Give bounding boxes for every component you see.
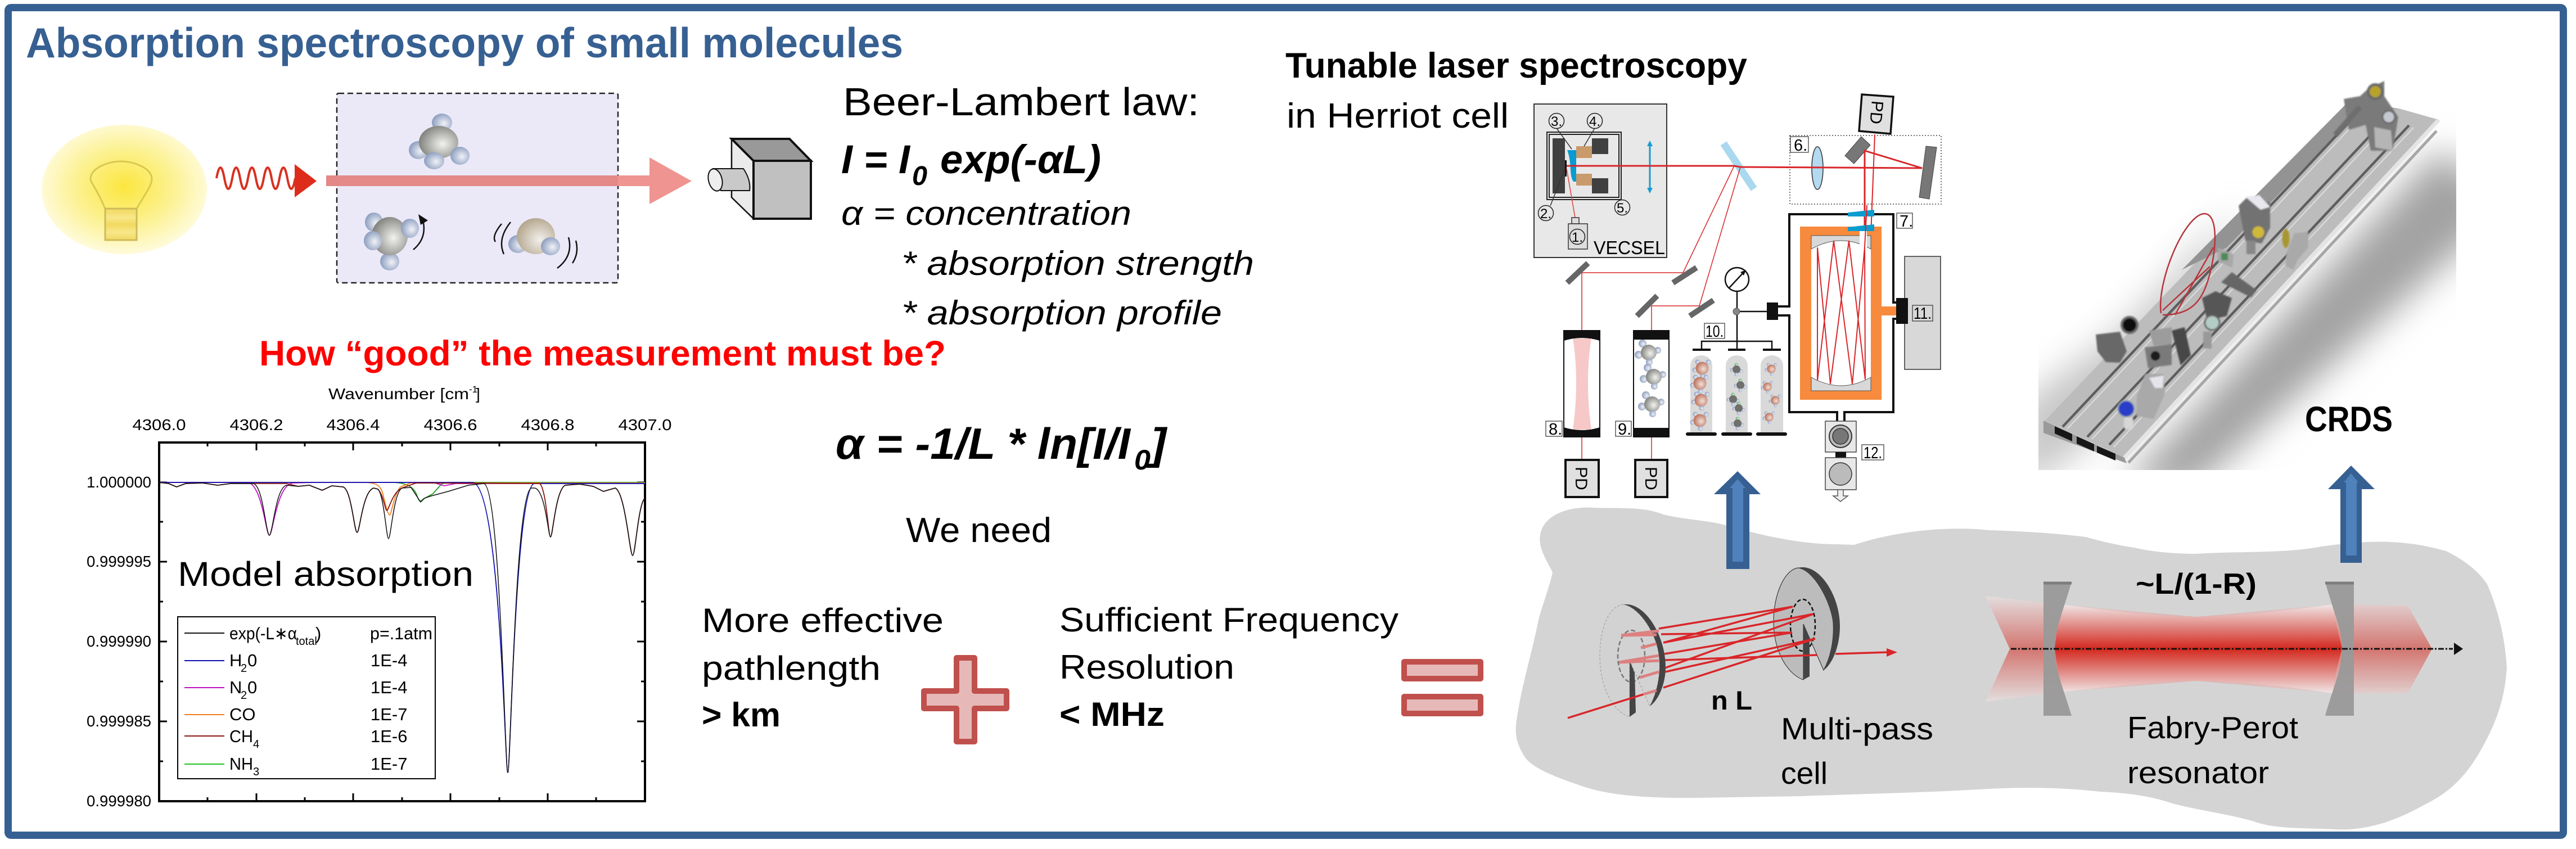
text: alpha definition bbox=[841, 195, 1254, 332]
square plate with hole bbox=[2149, 327, 2172, 346]
rail shadow bbox=[2038, 136, 2456, 470]
chart legend: 1E-4 bbox=[371, 651, 407, 670]
panel: VECSEL: 1. bbox=[1572, 230, 1583, 245]
equation: Beer-Lambert: I = I bbox=[841, 138, 910, 182]
text: sufficient frequency resolution bbox=[1059, 601, 1398, 733]
text: more effective pathlength bbox=[702, 602, 944, 734]
text: sufficient frequency resolution: Sufficient Frequency bbox=[1059, 601, 1398, 639]
component number labels: 10. bbox=[1706, 323, 1724, 341]
equation: alpha: ] bbox=[1146, 419, 1168, 468]
chart axis title: Wavenumber [cm bbox=[328, 385, 469, 403]
fibre loop bbox=[2160, 214, 2215, 315]
panel: VECSEL: 2. bbox=[1540, 206, 1551, 222]
text: sufficient frequency resolution: Resolution bbox=[1059, 648, 1234, 686]
title: Absorption spectroscopy of small molecules bbox=[26, 19, 903, 66]
text: multi-pass cell: Multi-pass bbox=[1781, 711, 1933, 746]
component number labels: 12. bbox=[1864, 444, 1882, 462]
text: n L: n L bbox=[1711, 685, 1752, 715]
chart x tick labels: 4306.0 bbox=[133, 416, 186, 433]
text: Fabry-Perot resonator: Fabry-Perot bbox=[2127, 710, 2298, 745]
chart legend: 1E-4 bbox=[371, 678, 407, 697]
text: Fabry-Perot resonator bbox=[2127, 710, 2298, 790]
right mirror disc bbox=[1774, 567, 1840, 680]
text: Beer-Lambert law: Beer-Lambert law: bbox=[843, 80, 1199, 124]
chart label: model absorption: Model absorption bbox=[178, 555, 473, 593]
left mirror disc bbox=[1600, 604, 1666, 717]
panel: VECSEL: 4. bbox=[1589, 114, 1600, 129]
icon: equals bbox=[1404, 662, 1481, 713]
chart legend: H bbox=[229, 651, 242, 670]
rail body bbox=[2045, 101, 2439, 458]
beam splitter bbox=[1724, 143, 1754, 189]
chart frame and ticks bbox=[159, 442, 645, 801]
chart x tick labels: 4307.0 bbox=[619, 416, 671, 433]
component number labels: 9. bbox=[1618, 421, 1631, 439]
text: multi-pass cell: cell bbox=[1781, 756, 1828, 791]
molecule: rotating bbox=[364, 213, 428, 270]
chart legend: 2 bbox=[241, 662, 247, 675]
photodetector: top bbox=[1859, 94, 1893, 134]
equation: alpha: 0 bbox=[1134, 444, 1151, 476]
panel: gas sample box bbox=[337, 93, 618, 283]
chart legend: NH bbox=[229, 754, 253, 774]
chart legend: 2 bbox=[241, 689, 247, 702]
text: more effective pathlength: pathlength bbox=[702, 649, 881, 687]
chart y tick labels: 1.000000 bbox=[87, 473, 151, 491]
text: more effective pathlength: More effective bbox=[702, 602, 944, 639]
gas cell 9 with molecules bbox=[1634, 331, 1669, 437]
chart y tick labels bbox=[87, 473, 151, 810]
text: more effective pathlength: > km bbox=[702, 696, 781, 734]
chart axis title: ] bbox=[476, 385, 480, 403]
equation: Beer-Lambert: exp(-αL) bbox=[940, 138, 1101, 182]
heading: tunable laser spectroscopy: in Herriot cell bbox=[1287, 97, 1509, 136]
plate bbox=[2221, 272, 2257, 297]
arrow: incoming wavy light bbox=[216, 164, 317, 197]
chart x tick labels bbox=[133, 416, 671, 433]
chart x tick labels: 4306.6 bbox=[424, 416, 477, 433]
panel: VECSEL: VECSEL bbox=[1594, 237, 1665, 258]
small mount bbox=[2285, 232, 2308, 270]
text: Fabry-Perot resonator: resonator bbox=[2127, 755, 2269, 790]
equation: alpha: α = -1/L * ln[I/I bbox=[836, 419, 1131, 468]
chart axis title: -1 bbox=[469, 384, 477, 395]
heading: how good: How “good” the measurement must be? bbox=[259, 334, 946, 373]
photodetectors bbox=[1566, 460, 1667, 497]
text: Beer-Lambert law bbox=[841, 80, 1254, 332]
chart y tick labels: 0.999985 bbox=[87, 712, 151, 730]
component number labels bbox=[1546, 137, 1933, 462]
optical axis bbox=[2011, 643, 2463, 655]
chart legend: 1E-6 bbox=[371, 726, 407, 746]
arrow: up to tunable laser setup bbox=[1714, 471, 1761, 569]
front left mount bbox=[2096, 332, 2127, 363]
equation: Beer-Lambert bbox=[841, 138, 1101, 191]
icon: detector bbox=[706, 139, 811, 219]
chart legend: 3 bbox=[253, 766, 259, 778]
component number labels: 6. bbox=[1794, 137, 1807, 155]
chart legend: 1E-7 bbox=[371, 754, 407, 774]
chart legend bbox=[178, 617, 435, 779]
text: CRDS: CRDS bbox=[2305, 400, 2393, 439]
mirrors bbox=[2043, 582, 2354, 716]
chart legend: 0 bbox=[247, 678, 257, 697]
panel: VECSEL: 3. bbox=[1551, 114, 1562, 129]
component number labels: 8. bbox=[1549, 421, 1562, 439]
chart y tick labels: 0.999980 bbox=[87, 792, 151, 810]
back cluster shape bbox=[2344, 81, 2398, 151]
steering mirrors bbox=[1567, 263, 1713, 316]
photodetector: top: PD bbox=[1866, 100, 1887, 125]
panel: section 6 optics bbox=[1790, 136, 1941, 204]
dark mount and disc bbox=[2202, 291, 2232, 320]
text: we need: We need bbox=[906, 511, 1052, 550]
diagram: tunable laser spectroscopy setup bbox=[1534, 94, 1941, 502]
chart legend: total bbox=[296, 635, 317, 648]
chart x tick labels: 4306.8 bbox=[521, 416, 575, 433]
molecule: static bbox=[409, 114, 470, 169]
molecule: vibrating bbox=[494, 218, 577, 268]
chart legend: p=.1atm bbox=[370, 624, 432, 643]
reflected spots on left mirror bbox=[1619, 631, 1659, 694]
chart legend: CH bbox=[229, 726, 253, 746]
equation: Beer-Lambert: 0 bbox=[912, 161, 927, 191]
arrow: up to CRDS bbox=[2328, 466, 2375, 563]
panel: Herriot cell chamber bbox=[1767, 205, 1941, 421]
component number labels: 11. bbox=[1914, 305, 1932, 323]
photodetectors: PD bbox=[1572, 467, 1590, 490]
diagram: multi-pass cell bbox=[1568, 567, 1897, 718]
chart x tick labels: 4306.4 bbox=[326, 416, 380, 433]
icon: light bulb bbox=[42, 125, 207, 254]
chart: model absorption spectrum bbox=[87, 384, 671, 810]
rail components bbox=[2096, 81, 2398, 430]
text: finesse formula: ~L/(1-R) bbox=[2136, 568, 2257, 600]
text: sufficient frequency resolution: < MHz bbox=[1059, 696, 1165, 733]
middle mount bbox=[2239, 198, 2270, 243]
gas cylinders bbox=[1688, 355, 1785, 434]
heading: tunable laser spectroscopy bbox=[1285, 46, 1747, 136]
green board bbox=[2218, 247, 2234, 268]
chart legend: 4 bbox=[253, 738, 259, 751]
chart y tick labels: 0.999995 bbox=[87, 553, 151, 570]
chart legend: 0 bbox=[247, 651, 257, 670]
text: alpha definition: * absorption strength bbox=[901, 245, 1254, 282]
text: alpha definition: * absorption profile bbox=[901, 294, 1222, 332]
chart legend: CO bbox=[229, 705, 255, 724]
panel: VECSEL: 5. bbox=[1617, 201, 1628, 216]
chart x tick labels: 4306.2 bbox=[229, 416, 283, 433]
panel: grey cavity-enhancement blob bbox=[1516, 508, 2507, 829]
chart legend: N bbox=[229, 678, 242, 697]
diagram: Fabry-Perot resonator bbox=[1986, 582, 2463, 716]
icon: plus bbox=[924, 658, 1007, 742]
gas cell 8 bbox=[1564, 331, 1600, 437]
resonator beam bbox=[1986, 596, 2432, 702]
front silver cluster bbox=[2136, 374, 2165, 419]
text: alpha definition: α = concentration bbox=[841, 195, 1131, 232]
heading: tunable laser spectroscopy: Tunable laser spectroscopy bbox=[1285, 46, 1747, 85]
chart legend: ) bbox=[315, 624, 321, 643]
photodetectors: PD bbox=[1641, 467, 1660, 490]
red multipass rays bbox=[1568, 607, 1888, 718]
panel: VECSEL bbox=[1534, 104, 1667, 258]
gas manifold and gauge bbox=[1693, 268, 1781, 350]
chart legend: 1E-7 bbox=[371, 705, 407, 724]
picture: CRDS optical rail bbox=[2038, 80, 2456, 470]
arrow: transmitted beam bbox=[326, 157, 692, 204]
chart legend: exp(-L∗α bbox=[229, 624, 297, 643]
component number labels: 7. bbox=[1900, 213, 1913, 231]
text: multi-pass cell bbox=[1781, 711, 1933, 791]
chart curves bbox=[159, 482, 645, 773]
laser beams bbox=[1567, 134, 1922, 460]
vacuum pump bbox=[1825, 421, 1856, 502]
chart y tick labels: 0.999990 bbox=[87, 633, 151, 650]
